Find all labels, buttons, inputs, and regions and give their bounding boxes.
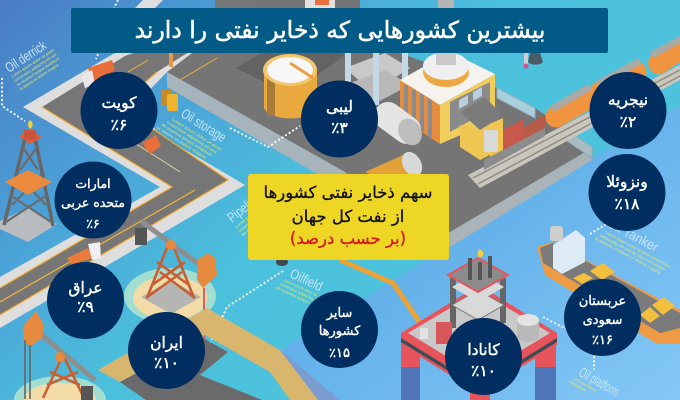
separator vessel [524, 53, 543, 68]
label: oil tanker: incididunt ut labore et dolore magna [594, 236, 662, 275]
label: oil storage: ut labore et dolore magna [155, 125, 208, 160]
label: oil tanker: Oil Tanker [605, 215, 662, 255]
callout: chart description: (بر حسب درصد) [290, 229, 406, 249]
country: Canada [445, 318, 522, 395]
country: Kuwait: کویت [102, 94, 137, 112]
country: Kuwait [80, 72, 158, 149]
label: oil platform: Lorem ipsum dolor sit [573, 376, 598, 393]
country: United Arab Emirates [54, 162, 132, 238]
country: United Arab Emirates: امارات [75, 176, 111, 192]
storage tank [263, 54, 317, 119]
country: Nigeria [590, 72, 666, 149]
label: pipeline [224, 188, 275, 237]
country: Kuwait: ٪۶ [111, 116, 127, 134]
label: oil tanker: adipiscing elit sed do eiusmod tempor [599, 233, 667, 272]
label: oil storage [155, 98, 233, 165]
trucks [67, 60, 161, 265]
country: United Arab Emirates: ٪۶ [86, 216, 100, 231]
country: Iraq: ٪۹ [77, 298, 94, 316]
label: oil storage: consectetur adipiscing elit sed [166, 119, 218, 154]
pumpjack two [14, 311, 106, 400]
country: Venezuela: ونزوئلا [606, 173, 648, 192]
loading annex [460, 97, 503, 160]
label: oil tanker: Lorem ipsum dolor sit amet consectetur [604, 230, 672, 269]
callout: chart description: سهم ذخایر نفتی کشورها [264, 183, 432, 203]
rail line [468, 65, 680, 188]
label: oil derrick: Lorem ipsum dolor sit amet [10, 47, 56, 79]
label: oil storage: do eiusmod tempor incididunt [161, 122, 213, 158]
country: United Arab Emirates: متحده عربی [61, 195, 125, 211]
factory platform [167, 0, 592, 250]
title bar: بیشترین کشورهایی که ذخایر نفتی را دارند [135, 16, 545, 44]
country: Libya: لیبی [326, 98, 353, 116]
offshore platform [401, 249, 557, 400]
label: oil derrick: do eiusmod tempor incididunt [16, 55, 61, 87]
fuel barrels [162, 89, 178, 111]
road network [0, 0, 290, 328]
label: oil derrick: ut labore et dolore magna [18, 62, 60, 91]
country: Iran: ایران [150, 334, 183, 352]
callout: chart description [248, 174, 449, 260]
label: oilfield: Lorem ipsum dolor sit [283, 278, 319, 298]
trench bank and pit [98, 308, 318, 400]
orange pipeline [340, 260, 420, 323]
label: oil tanker [594, 213, 680, 278]
title bar [71, 8, 608, 53]
sea area [280, 105, 680, 400]
country: Canada: ٪۱۰ [471, 362, 496, 380]
country: Iran [128, 312, 205, 389]
label: pipeline: Lorem ipsum dolor sit [234, 200, 269, 229]
main factory building [400, 45, 495, 144]
label: oil storage: Oil storage [178, 105, 229, 145]
country: Saudi Arabia [564, 279, 641, 356]
country: Iraq [47, 262, 124, 339]
country: other countries: ٪۱۵ [329, 346, 350, 361]
country: Saudi Arabia: سعودی [583, 313, 622, 328]
country: Nigeria: نیجریه [608, 91, 648, 109]
country: Saudi Arabia: ٪۱۶ [592, 333, 613, 348]
label: oil platform [569, 362, 623, 400]
label: pipeline: Pipeline [224, 189, 264, 225]
label: oilfield: consectetur adipiscing [279, 281, 314, 301]
country: Venezuela [588, 154, 666, 231]
country: Canada: کانادا [467, 341, 500, 359]
callout: chart description: از نفت کل جهان [292, 207, 404, 227]
dark valve near oilfield [276, 258, 288, 266]
label: oil derrick [2, 34, 64, 91]
country: other countries [301, 291, 378, 368]
label: oil derrick: Oil derrick [2, 37, 50, 76]
white horizontal tank [388, 114, 427, 150]
scaffold structure [345, 53, 410, 105]
country: Libya: ٪۳ [331, 119, 348, 137]
country: other countries: کشورها [319, 324, 361, 339]
oil derrick tower [0, 120, 57, 242]
train tank wagons [552, 36, 680, 117]
label: oil storage: Lorem ipsum dolor sit amet [171, 117, 224, 152]
country: other countries: سایر [326, 306, 352, 321]
label: oil derrick: consectetur adipiscing elit sed [13, 52, 57, 83]
label: pipeline: consectetur adipiscing [237, 205, 272, 233]
country: Saudi Arabia: عربستان [579, 294, 626, 309]
label: oilfield [275, 262, 325, 307]
pumpjack one [124, 221, 217, 340]
oil tanker ship [537, 226, 680, 344]
country: Venezuela: ٪۱۸ [615, 195, 639, 213]
yellow horizontal tank [365, 148, 426, 185]
label: oil platform: adipiscing elit [569, 379, 587, 393]
label: pipeline: do eiusmod tempor [240, 208, 275, 237]
country: Libya [301, 80, 378, 158]
label: oilfield: Oilfield [288, 265, 325, 294]
country: Iraq: عراق [68, 279, 103, 297]
locomotive [484, 115, 545, 170]
country: Iran: ٪۱۰ [154, 354, 179, 372]
label: oilfield: do eiusmod tempor [275, 285, 311, 305]
country: Nigeria: ٪۲ [620, 113, 636, 131]
